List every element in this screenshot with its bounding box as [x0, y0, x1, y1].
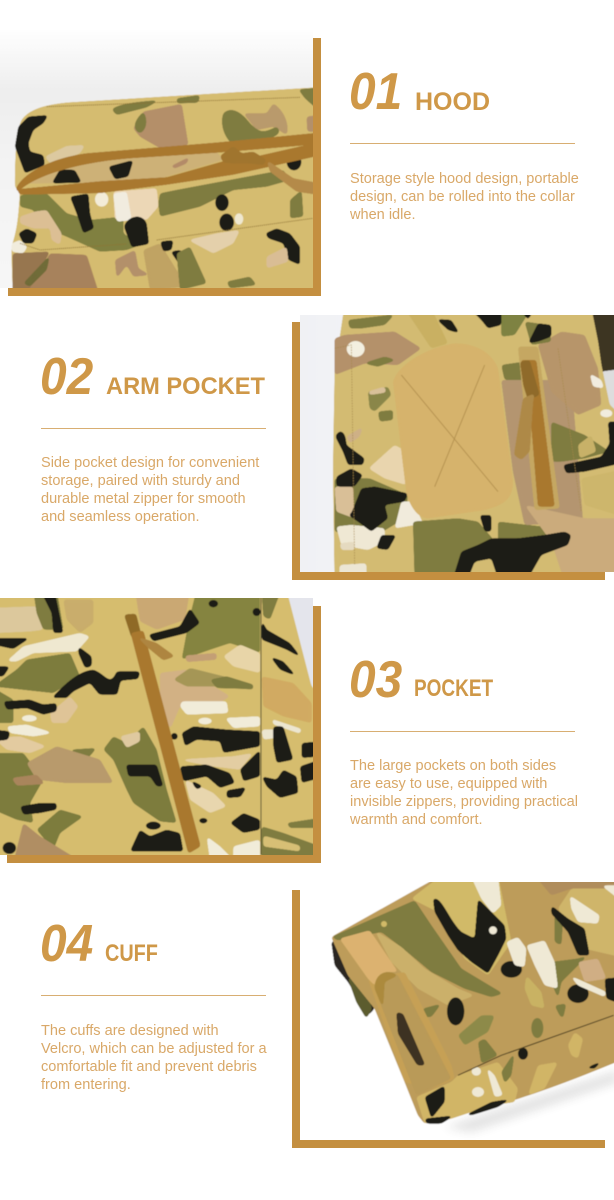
text: cuff description — [41, 1023, 267, 1093]
heading: 01 HOOD: 01 — [349, 63, 402, 121]
heading: 03 POCKET — [349, 651, 493, 709]
heading: 02 ARM POCKET: ARM POCKET — [106, 373, 265, 400]
text: arm pocket description: durable metal zipper for smooth — [41, 491, 246, 507]
text: cuff description: The cuffs are designed with — [41, 1023, 219, 1039]
divider — [350, 143, 575, 144]
heading: 01 HOOD — [349, 63, 490, 121]
text: hood description: when idle. — [350, 207, 416, 223]
text: hood description: design, can be rolled into the collar — [350, 189, 575, 205]
text: arm pocket description — [41, 455, 260, 525]
text: hood description: Storage style hood design, portable — [350, 171, 579, 187]
frame: gold corner — [7, 606, 321, 863]
text: hood description — [350, 171, 579, 223]
text: pocket description: are easy to use, equipped with — [350, 776, 547, 792]
text: pocket description: warmth and comfort. — [350, 812, 483, 828]
text: cuff description: from entering. — [41, 1077, 131, 1093]
text: pocket description: invisible zippers, providing practical — [350, 794, 578, 810]
text: arm pocket description: storage, paired with sturdy and — [41, 473, 240, 489]
photo: side pocket zipper — [0, 598, 313, 855]
heading: 01 HOOD: HOOD — [415, 88, 490, 116]
panel: 01 hood — [0, 38, 579, 296]
text: cuff description: comfortable fit and prevent debris — [41, 1059, 257, 1075]
photo: hood zipper — [0, 58, 313, 288]
heading: 03 POCKET: POCKET — [414, 675, 493, 702]
text: pocket description — [350, 758, 578, 828]
frame: gold corner — [292, 890, 605, 1148]
photo: arm patch and zipper — [300, 315, 614, 572]
heading: 04 CUFF — [40, 915, 158, 973]
heading: 04 CUFF: CUFF — [105, 940, 158, 967]
frame: gold corner — [292, 322, 605, 580]
text: pocket description: The large pockets on both sides — [350, 758, 556, 774]
panel: 02 arm pocket — [40, 315, 614, 580]
divider — [41, 428, 266, 429]
heading: 02 ARM POCKET: 02 — [40, 348, 93, 406]
text: arm pocket description: Side pocket design for convenient — [41, 455, 259, 471]
divider — [350, 731, 575, 732]
panel: 04 cuff — [40, 882, 614, 1148]
text: cuff description: Velcro, which can be adjusted for a — [41, 1041, 267, 1057]
heading: 04 CUFF: 04 — [40, 915, 93, 973]
panel: 03 pocket — [0, 598, 578, 863]
frame: gold corner — [8, 38, 321, 296]
heading: 02 ARM POCKET — [40, 348, 265, 406]
divider — [41, 995, 266, 996]
text: arm pocket description: and seamless operation. — [41, 509, 200, 525]
photo: sleeve cuff with velcro tab — [330, 882, 614, 1134]
heading: 03 POCKET: 03 — [349, 651, 402, 709]
